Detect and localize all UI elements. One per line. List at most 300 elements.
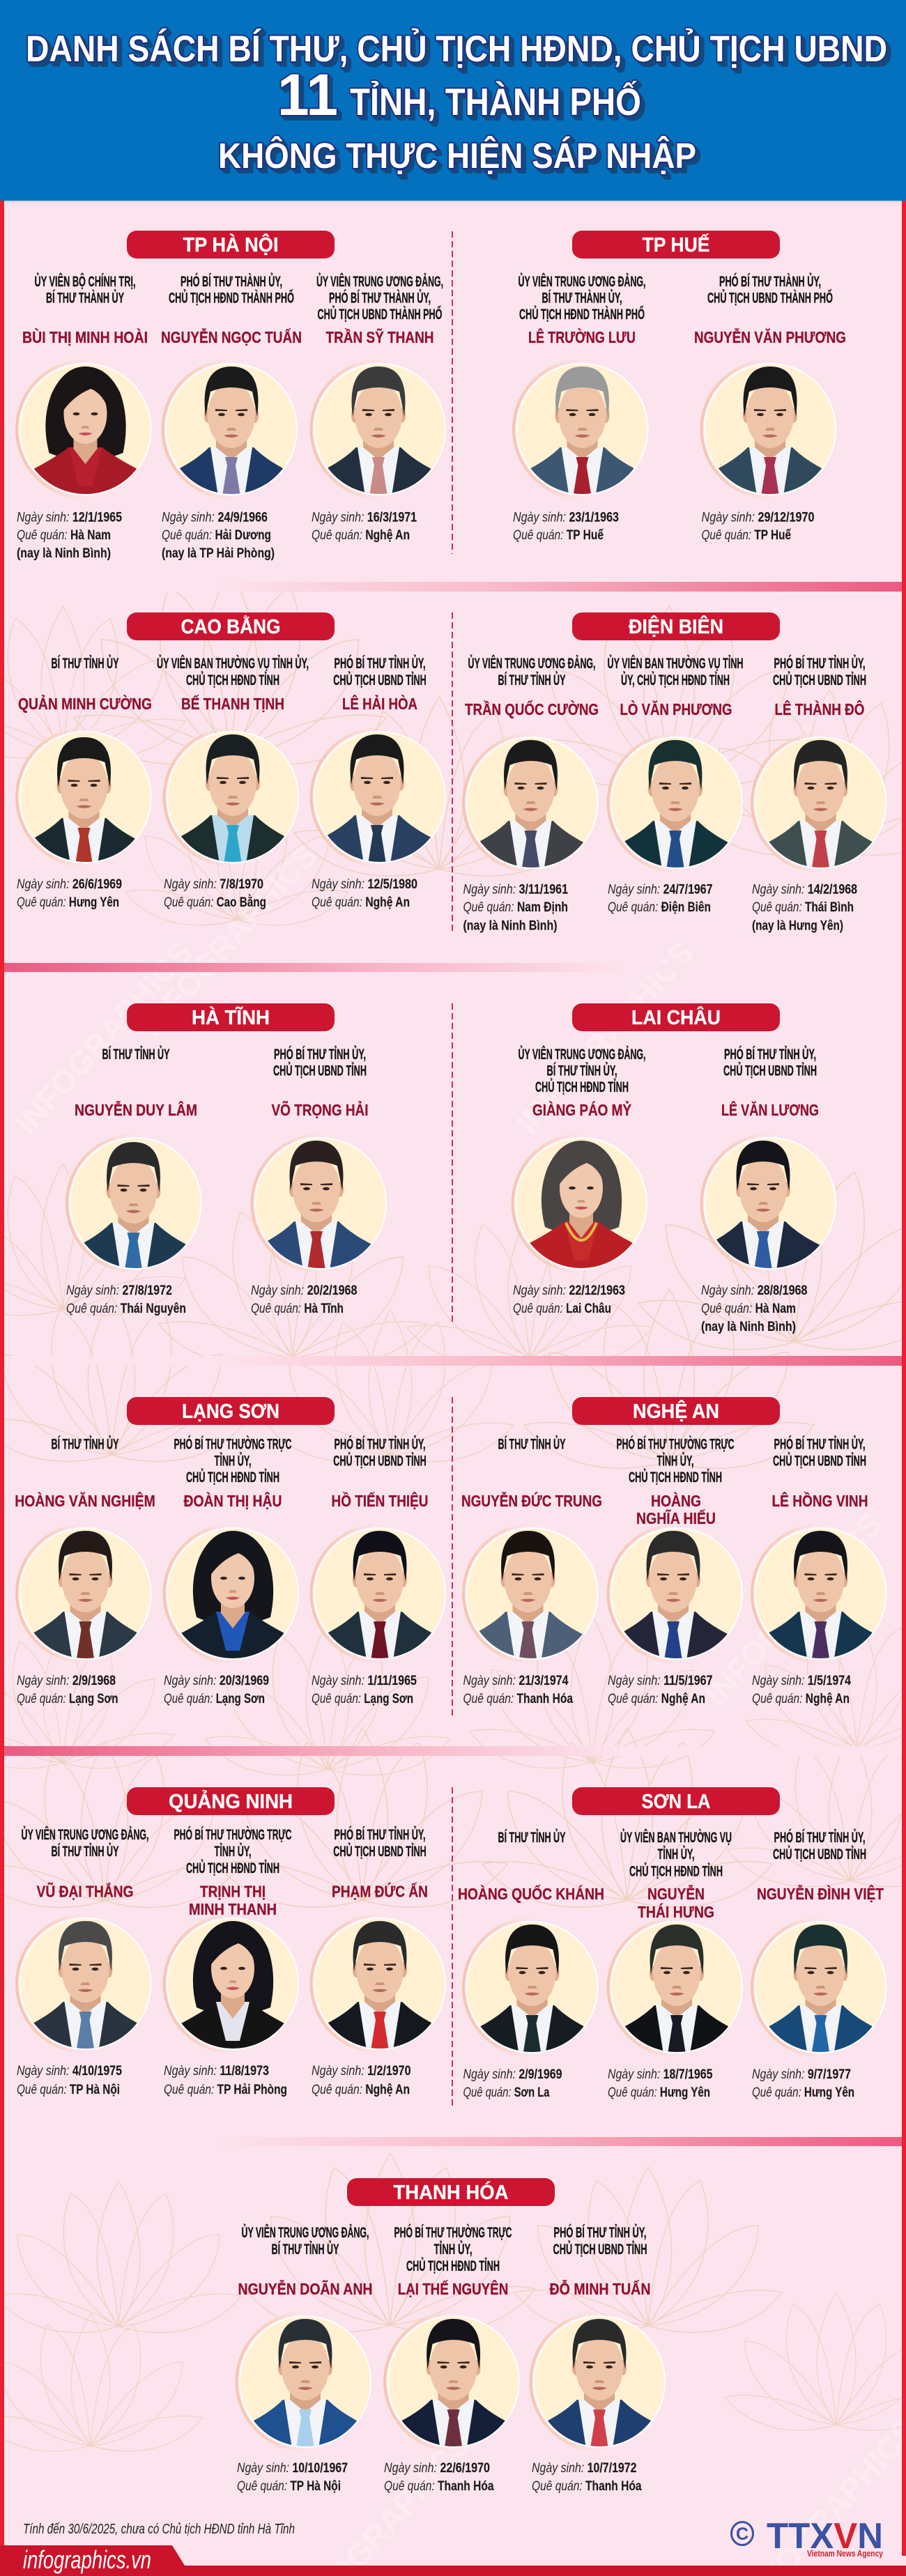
info	[701, 1283, 807, 1334]
portrait	[17, 1915, 154, 2056]
role: PHÓ BÍ THƯ THÀNH ỦY,	[181, 273, 282, 290]
info	[66, 1283, 186, 1316]
heading: TP Huế	[572, 231, 780, 259]
person: Lê Hồng Vinh	[752, 1436, 889, 1706]
info	[463, 882, 568, 934]
info: Ngày sinh: 10/10/1967	[237, 2461, 348, 2476]
role	[394, 2224, 512, 2274]
portrait	[531, 2313, 668, 2454]
heading: Nghệ An	[572, 1397, 780, 1425]
role: ỦY VIÊN BAN THƯỜNG VỤ	[620, 1829, 732, 1846]
person: Hồ Tiến Thiệu	[311, 1436, 449, 1706]
role	[333, 1436, 427, 1470]
name: ĐOÀN THỊ HẬU	[184, 1491, 282, 1510]
title	[26, 28, 887, 176]
panel: Điện Biên	[463, 612, 889, 934]
role	[273, 1046, 367, 1079]
role: ỦY VIÊN BỘ CHÍNH TRỊ,	[35, 273, 135, 290]
name: THÁI HƯNG	[638, 1902, 714, 1921]
name: NGUYỄN	[647, 1883, 705, 1903]
info	[463, 2067, 562, 2100]
role: CHỦ TỊCH UBND TỈNH	[333, 1453, 427, 1470]
name: HOÀNG QUỐC KHÁNH	[458, 1884, 604, 1903]
person: Nguyễn Văn Phương	[694, 273, 846, 543]
info: Ngày sinh: 4/10/1975	[17, 2064, 122, 2078]
role: PHÓ BÍ THƯ THƯỜNG TRỰC	[394, 2224, 512, 2241]
role: ỦY VIÊN TRUNG ƯƠNG ĐẢNG,	[316, 273, 443, 290]
portrait	[463, 1525, 601, 1666]
person: Lê Trường Lưu	[513, 273, 651, 543]
heading: TP Huế: TP HUẾ	[643, 233, 709, 256]
info	[17, 510, 122, 561]
heading: Sơn La	[572, 1787, 780, 1815]
portrait	[164, 1525, 301, 1666]
role	[608, 655, 743, 688]
info	[164, 2064, 287, 2097]
role	[553, 2224, 647, 2258]
info: Quê quán: Lạng Sơn	[164, 1692, 265, 1706]
panel: Thanh Hóa	[237, 2178, 668, 2494]
name: LÊ THÀNH ĐÔ	[775, 700, 864, 718]
role: BÍ THƯ TỈNH ỦY	[102, 1046, 170, 1063]
role: CHỦ TỊCH HĐND TỈNH	[186, 1469, 279, 1486]
role	[21, 1826, 149, 1860]
info: (nay là Ninh Bình)	[17, 546, 111, 561]
portrait	[514, 361, 651, 502]
info: Quê quán: TP Hà Nội	[237, 2479, 341, 2494]
info: Ngày sinh: 12/5/1980	[312, 877, 417, 892]
role: PHÓ BÍ THƯ TỈNH ỦY,	[274, 1046, 366, 1063]
info: (nay là Hưng Yên)	[752, 918, 843, 934]
role	[773, 1436, 866, 1470]
info: Ngày sinh: 2/9/1969	[463, 2067, 562, 2082]
name: HOÀNG VĂN NGHIỆM	[15, 1491, 155, 1510]
portrait	[67, 1134, 204, 1277]
name: TRẦN SỸ THANH	[326, 327, 433, 346]
person: Lê Văn Lương	[701, 1046, 839, 1334]
info: Quê quán: Lạng Sơn	[17, 1692, 118, 1706]
portrait	[237, 2313, 374, 2454]
portrait	[752, 1525, 889, 1666]
role: ỦY VIÊN TRUNG ƯƠNG ĐẢNG,	[519, 1046, 645, 1063]
name: QUẢN MINH CƯỜNG	[18, 693, 152, 713]
header band	[0, 0, 906, 201]
role: PHÓ BÍ THƯ THƯỜNG TRỰC	[174, 1436, 291, 1453]
name: VÕ TRỌNG HẢI	[272, 1100, 368, 1119]
info: Quê quán: Hải Dương	[162, 528, 271, 543]
portrait	[608, 1525, 746, 1666]
role: PHÓ BÍ THƯ THƯỜNG TRỰC	[174, 1826, 291, 1843]
title: TỈNH, THÀNH PHỐ	[350, 80, 641, 123]
role: ỦY VIÊN BAN THƯỜNG VỤ TỈNH ỦY,	[157, 655, 309, 672]
site name: infographics.vn	[23, 2545, 151, 2574]
portrait	[252, 1134, 389, 1276]
role: BÍ THƯ TỈNH ỦY	[52, 655, 118, 672]
role: CHỦ TỊCH HĐND TỈNH	[535, 1079, 629, 1095]
info: Quê quán: Thái Nguyên	[66, 1302, 186, 1316]
info: Quê quán: Nghệ An	[312, 2083, 410, 2097]
info	[237, 2461, 348, 2494]
info: Quê quán: TP Huế	[701, 528, 791, 543]
role: CHỦ TỊCH HĐND THÀNH PHỐ	[169, 290, 294, 307]
panel: Sơn La	[458, 1787, 889, 2100]
role: CHỦ TỊCH UBND THÀNH PHỐ	[318, 306, 442, 323]
heading: Cao Bằng: CAO BẰNG	[181, 615, 280, 638]
role	[169, 273, 294, 307]
info	[513, 1283, 625, 1316]
background lotus pattern	[0, 571, 906, 2451]
person: Nguyễn Duy Lâm	[66, 1046, 204, 1316]
heading: Sơn La: SƠN LA	[641, 1791, 711, 1813]
info	[17, 1674, 118, 1706]
name: LÊ TRƯỜNG LƯU	[528, 327, 636, 346]
name: NGUYỄN ĐÌNH VIỆT	[757, 1883, 884, 1903]
name: BẾ THANH TỊNH	[181, 694, 284, 713]
person: Nguyễn Đình Việt	[752, 1829, 889, 2100]
info: Quê quán: TP Huế	[513, 528, 604, 543]
person: Vũ Đại Thắng	[17, 1826, 154, 2097]
role	[519, 1046, 645, 1095]
name: LÊ VĂN LƯƠNG	[721, 1100, 819, 1119]
role: BÍ THƯ TỈNH ỦY	[498, 672, 566, 688]
info	[608, 2067, 713, 2100]
person: Trần Sỹ Thanh	[311, 273, 449, 543]
heading: Quảng Ninh	[127, 1787, 335, 1815]
watermark: INFOGRAPHICS	[509, 934, 700, 1141]
info: Quê quán: Thanh Hóa	[384, 2479, 494, 2494]
role: BÍ THƯ TỈNH ỦY	[498, 1436, 566, 1453]
role: CHỦ TỊCH HĐND TỈNH	[629, 1863, 723, 1880]
info: Ngày sinh: 22/12/1963	[513, 1283, 625, 1298]
info: Ngày sinh: 18/7/1965	[608, 2067, 713, 2082]
role: BÍ THƯ TỈNH ỦY	[498, 1829, 566, 1846]
role	[468, 655, 595, 688]
role: ỦY VIÊN TRUNG ƯƠNG ĐẢNG,	[241, 2224, 369, 2241]
role: PHÓ BÍ THƯ THƯỜNG TRỰC	[616, 1436, 735, 1453]
info: (nay là Ninh Bình)	[463, 918, 558, 934]
role	[333, 1826, 427, 1860]
watermark: INFOGRAPHICS	[698, 1506, 889, 1713]
info: Ngày sinh: 26/6/1969	[17, 877, 122, 892]
logo: TTXVN: Vietnam News Agency	[807, 2548, 884, 2559]
portrait	[17, 1525, 154, 1666]
portrait	[463, 1919, 601, 2060]
heading: Quảng Ninh: QUẢNG NINH	[169, 1789, 293, 1813]
info: Ngày sinh: 28/8/1968	[701, 1283, 807, 1298]
person: Lại Thế Nguyên	[384, 2224, 522, 2494]
heading: Lạng Sơn: LẠNG SƠN	[182, 1401, 279, 1423]
name: NGUYỄN DUY LÂM	[75, 1100, 197, 1119]
role: ỦY VIÊN TRUNG ƯƠNG ĐẢNG,	[468, 655, 595, 672]
footnote: Tính đến 30/6/2025, chưa có Chủ tịch HĐND tỉnh Hà Tĩnh	[23, 2522, 295, 2537]
role: ỦY VIÊN TRUNG ƯƠNG ĐẢNG,	[519, 273, 645, 290]
info: Quê quán: Lạng Sơn	[312, 1692, 413, 1706]
info: Ngày sinh: 24/9/1966	[162, 510, 268, 525]
person: Trịnh Thị Minh Thanh	[164, 1826, 301, 2097]
panel: TP Hà Nội	[17, 231, 449, 561]
info: Quê quán: Thanh Hóa	[463, 1692, 573, 1706]
info	[312, 2064, 411, 2097]
info: Ngày sinh: 23/1/1963	[513, 510, 619, 525]
info: Quê quán: TP Hải Phòng	[164, 2083, 287, 2097]
role: PHÓ BÍ THƯ TỈNH ỦY,	[724, 1046, 816, 1063]
info: Ngày sinh: 2/9/1968	[17, 1674, 116, 1688]
info: Quê quán: Cao Bằng	[164, 895, 266, 910]
info: Ngày sinh: 10/7/1972	[532, 2461, 637, 2476]
info: Ngày sinh: 14/2/1968	[752, 882, 857, 897]
portrait	[17, 361, 154, 502]
role	[723, 1046, 817, 1079]
panel: Cao Bằng	[17, 612, 449, 910]
role: TỈNH ỦY,	[658, 1846, 694, 1862]
info: Quê quán: TP Hà Nội	[17, 2083, 120, 2097]
info: Ngày sinh: 20/3/1969	[164, 1674, 269, 1688]
person: Trần Quốc Cường	[463, 655, 601, 934]
name: LÒ VĂN PHƯƠNG	[620, 700, 732, 718]
info: (nay là Ninh Bình)	[701, 1320, 796, 1334]
heading: Điện Biên: ĐIỆN BIÊN	[629, 615, 723, 638]
portrait	[463, 734, 601, 875]
heading: Hà Tĩnh: HÀ TĨNH	[192, 1005, 270, 1029]
portrait	[608, 734, 746, 875]
info: Ngày sinh: 29/12/1970	[701, 510, 814, 525]
name: HỒ TIẾN THIỆU	[332, 1491, 428, 1510]
info	[17, 877, 122, 910]
role: PHÓ BÍ THƯ TỈNH ỦY,	[335, 1826, 425, 1843]
info	[17, 2064, 122, 2097]
info	[251, 1283, 357, 1316]
name: TRỊNH THỊ	[200, 1883, 266, 1901]
portrait	[701, 361, 839, 502]
info: Ngày sinh: 11/5/1967	[608, 1674, 712, 1688]
info: Ngày sinh: 27/8/1972	[66, 1283, 172, 1298]
info: Ngày sinh: 1/2/1970	[312, 2064, 411, 2078]
role: TỈNH ỦY,	[215, 1843, 251, 1860]
name: PHẠM ĐỨC ẤN	[332, 1881, 428, 1901]
info: Quê quán: Hưng Yên	[17, 895, 119, 910]
person: Nguyễn Ngọc Tuấn	[161, 273, 302, 561]
name: LÊ HỒNG VINH	[772, 1491, 868, 1510]
role: ỦY, CHỦ TỊCH HĐND TỈNH	[621, 672, 730, 688]
info: Quê quán: Hà Nam	[701, 1302, 796, 1316]
person: Lê Hải Hòa	[311, 655, 449, 910]
role: BÍ THƯ TỈNH ỦY,	[546, 1063, 617, 1079]
info: Quê quán: Nghệ An	[312, 528, 410, 543]
portrait	[701, 1134, 839, 1276]
heading: Thanh Hóa	[347, 2178, 555, 2206]
info	[463, 1674, 573, 1706]
role	[174, 1436, 291, 1486]
info: Ngày sinh: 21/3/1974	[463, 1674, 569, 1688]
panel: Lai Châu	[513, 1003, 839, 1334]
role: CHỦ TỊCH HĐND TỈNH	[406, 2258, 500, 2274]
role: BÍ THƯ TỈNH ỦY	[272, 2241, 339, 2258]
logo: TTXVN: C	[736, 2524, 748, 2544]
info: Quê quán: Sơn La	[463, 2085, 550, 2100]
heading: Lai Châu	[572, 1003, 780, 1031]
info	[513, 510, 619, 543]
role: BÍ THƯ TỈNH ỦY	[52, 1843, 118, 1860]
heading: Điện Biên	[572, 612, 780, 640]
info: Ngày sinh: 12/1/1965	[17, 510, 122, 525]
role: CHỦ TỊCH HĐND TỈNH	[186, 1860, 279, 1876]
person: Hoàng Nghĩa Hiếu	[608, 1436, 746, 1706]
info: Ngày sinh: 20/2/1968	[251, 1283, 357, 1298]
role: PHÓ BÍ THƯ TỈNH ỦY,	[335, 1436, 425, 1453]
info: Quê quán: Nam Định	[463, 900, 568, 915]
info: Ngày sinh: 22/6/1970	[384, 2461, 490, 2476]
watermark	[8, 837, 906, 2576]
person: Hoàng Văn Nghiệm	[15, 1436, 155, 1706]
name: HOÀNG	[651, 1491, 701, 1510]
info: Quê quán: Thái Bình	[752, 900, 854, 915]
person: Lê Thành Đô	[752, 655, 889, 934]
info	[384, 2461, 494, 2494]
portrait	[311, 729, 449, 870]
column dividers	[452, 231, 453, 2109]
info	[164, 1674, 269, 1706]
name: NGUYỄN NGỌC TUẤN	[161, 327, 302, 346]
info	[752, 1674, 851, 1706]
panel: Nghệ An	[461, 1397, 889, 1706]
role: TỈNH ỦY,	[657, 1453, 694, 1470]
name: NGUYỄN VĂN PHƯƠNG	[694, 327, 846, 346]
role: CHỦ TỊCH UBND TỈNH	[333, 672, 427, 688]
heading: Lai Châu: LAI CHÂU	[631, 1005, 721, 1029]
role: PHÓ BÍ THƯ THÀNH ỦY,	[719, 273, 821, 290]
name: NGUYỄN DOÃN ANH	[238, 2278, 372, 2298]
info: Quê quán: Nghệ An	[608, 1692, 705, 1706]
role: TỈNH ỦY,	[215, 1453, 251, 1470]
person: Đỗ Minh Tuấn	[531, 2224, 668, 2494]
heading: Thanh Hóa: THANH HÓA	[393, 2180, 509, 2204]
person: Nguyễn Đức Trung	[461, 1436, 602, 1706]
info: Ngày sinh: 3/11/1961	[463, 882, 568, 897]
role: ỦY VIÊN BAN THƯỜNG VỤ TỈNH	[608, 655, 743, 672]
info	[312, 877, 417, 910]
panel: TP Huế	[513, 231, 846, 543]
person: Hoàng Quốc Khánh	[458, 1829, 604, 2100]
info: Quê quán: Hưng Yên	[752, 2085, 854, 2100]
info: Ngày sinh: 11/8/1973	[164, 2064, 269, 2078]
info: (nay là TP Hải Phòng)	[162, 546, 275, 561]
role: PHÓ BÍ THƯ TỈNH ỦY,	[553, 2224, 647, 2241]
info: Ngày sinh: 16/3/1971	[312, 510, 417, 525]
name: LÊ HẢI HÒA	[342, 693, 417, 713]
portrait	[752, 734, 889, 875]
role: CHỦ TỊCH UBND TỈNH	[723, 1063, 817, 1079]
portrait	[17, 729, 154, 872]
role	[773, 1829, 866, 1862]
portrait	[163, 361, 300, 502]
heading: TP Hà Nội: TP HÀ NỘI	[183, 233, 279, 256]
info: Quê quán: Điện Biên	[608, 900, 711, 915]
role: TỈNH ỦY,	[433, 2241, 473, 2258]
role	[616, 1436, 735, 1486]
role: CHỦ TỊCH UBND TỈNH	[273, 1063, 367, 1079]
info: Ngày sinh: 24/7/1967	[608, 882, 712, 897]
role: BÍ THƯ THÀNH ỦY,	[542, 290, 622, 307]
logo: TTXVN: TTXVN	[767, 2516, 883, 2556]
heading: Cao Bằng	[127, 612, 335, 640]
role	[316, 273, 443, 323]
section bands	[4, 582, 902, 2146]
role: PHÓ BÍ THƯ TỈNH ỦY,	[335, 655, 425, 672]
info: Quê quán: Hà Tĩnh	[251, 1302, 344, 1316]
portrait	[311, 361, 449, 502]
info	[532, 2461, 642, 2494]
name	[636, 1491, 716, 1527]
role	[241, 2224, 369, 2258]
portrait	[513, 1134, 650, 1276]
name: BÙI THỊ MINH HOÀI	[22, 327, 148, 346]
portrait	[164, 1915, 301, 2056]
info: Quê quán: Nghệ An	[752, 1692, 850, 1706]
role: BÍ THƯ TỈNH ỦY	[52, 1436, 118, 1453]
info	[608, 882, 712, 915]
portrait	[752, 1919, 889, 2060]
heading: Lạng Sơn	[127, 1397, 335, 1425]
person: Đoàn Thị Hậu	[164, 1436, 301, 1706]
role	[620, 1829, 732, 1880]
panel: Quảng Ninh	[17, 1787, 449, 2097]
info: Quê quán: Lai Châu	[513, 1302, 611, 1316]
person: Nguyễn Thái Hưng	[608, 1829, 746, 2100]
role	[174, 1826, 291, 1876]
person: Bế Thanh Tịnh	[157, 655, 309, 910]
name: ĐỖ MINH TUẤN	[549, 2278, 651, 2298]
info: Quê quán: Nghệ An	[312, 895, 410, 910]
info: Ngày sinh: 9/7/1977	[752, 2067, 851, 2082]
person: Võ Trọng Hải	[251, 1046, 389, 1316]
person: Nguyễn Doãn Anh	[237, 2224, 374, 2494]
person: Bùi Thị Minh Hoài	[17, 273, 154, 561]
name: GIÀNG PÁO MỶ	[532, 1100, 631, 1119]
info	[312, 1674, 417, 1706]
panel: Lạng Sơn	[15, 1397, 449, 1706]
person: Quản Minh Cường	[17, 655, 154, 910]
role	[519, 273, 645, 323]
name: TRẦN QUỐC CƯỜNG	[465, 700, 599, 718]
role	[157, 655, 309, 688]
role: PHÓ BÍ THƯ THÀNH ỦY,	[329, 290, 431, 307]
info	[701, 510, 814, 543]
name: MINH THANH	[189, 1900, 277, 1918]
role: CHỦ TỊCH HĐND TỈNH	[629, 1469, 722, 1486]
heading: TP Hà Nội	[127, 231, 335, 259]
role	[35, 273, 135, 307]
title: KHÔNG THỰC HIỆN SÁP NHẬP	[218, 135, 696, 176]
heading: Nghệ An: NGHỆ AN	[633, 1399, 719, 1423]
name	[638, 1883, 714, 1921]
role	[773, 655, 866, 688]
portrait	[608, 1919, 746, 2060]
person: Giàng Páo Mỷ	[513, 1046, 650, 1316]
info: Ngày sinh: 7/8/1970	[164, 877, 263, 892]
person: Phạm Đức Ấn	[311, 1826, 449, 2097]
role: CHỦ TỊCH HĐND TỈNH	[186, 672, 279, 688]
info	[312, 510, 417, 543]
role: CHỦ TỊCH UBND TỈNH	[553, 2241, 647, 2258]
heading: Hà Tĩnh	[127, 1003, 335, 1031]
info	[752, 882, 857, 934]
name	[189, 1883, 277, 1918]
name: LẠI THẾ NGUYÊN	[398, 2279, 508, 2298]
name: NGUYỄN ĐỨC TRUNG	[461, 1490, 602, 1510]
portrait	[385, 2313, 522, 2454]
name: VŨ ĐẠI THẮNG	[36, 1881, 134, 1901]
role	[707, 273, 833, 307]
